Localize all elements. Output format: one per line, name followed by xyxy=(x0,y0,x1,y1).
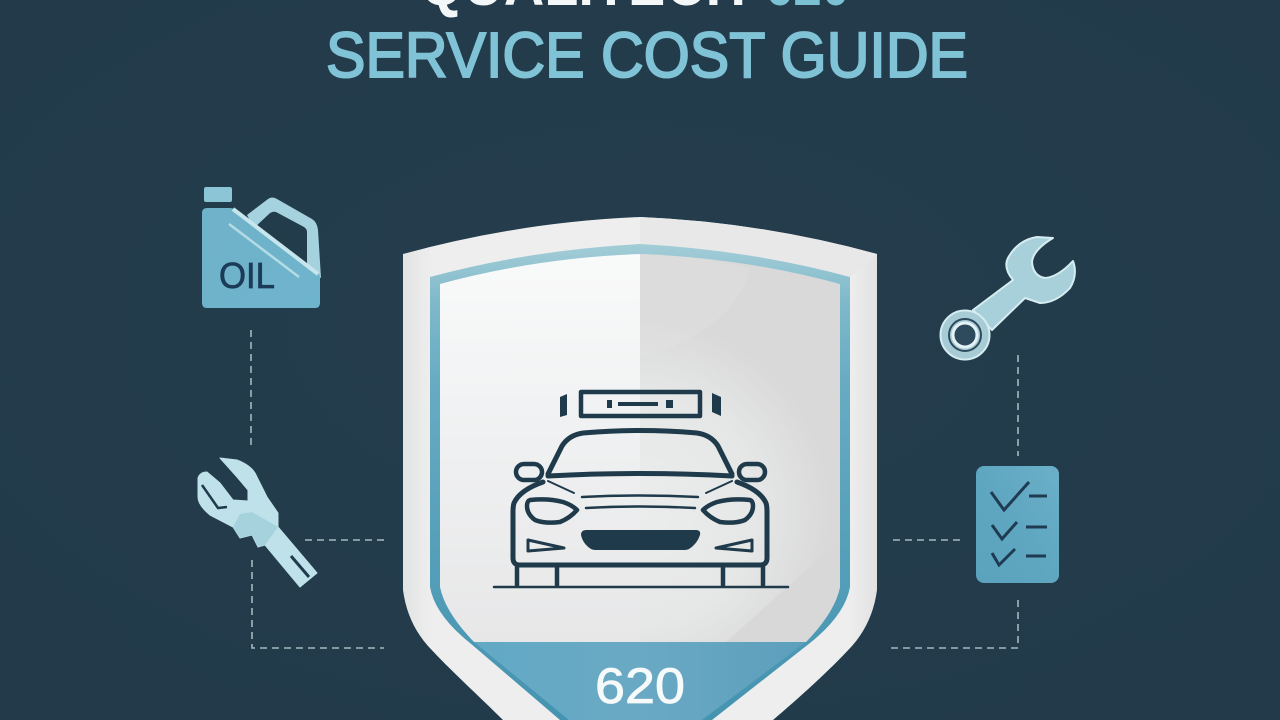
ground line xyxy=(494,586,788,588)
lift bar above car xyxy=(560,392,721,417)
headlights xyxy=(527,499,577,523)
car mirrors xyxy=(516,464,542,480)
shield blue border xyxy=(430,244,850,720)
icon: car front with lift bar xyxy=(494,392,788,587)
title line 2: SERVICE COST GUIDE xyxy=(326,19,968,91)
icon: oil canister: OIL xyxy=(219,255,275,296)
car windshield and hood line xyxy=(548,430,732,474)
hood lines xyxy=(582,496,698,508)
icon: checklist xyxy=(976,466,1059,583)
shield model band xyxy=(474,642,806,720)
car body xyxy=(513,482,767,565)
title xyxy=(326,0,968,91)
model number: 620 xyxy=(595,658,685,714)
shield badge xyxy=(403,217,877,720)
shield inner panel xyxy=(440,254,840,642)
icon: oil canister xyxy=(202,187,321,308)
dashed connector lines xyxy=(251,330,1018,648)
icon: spanner xyxy=(940,237,1075,360)
grille xyxy=(581,530,700,550)
icon: adjustable wrench xyxy=(198,458,317,587)
shield outer rim xyxy=(403,217,877,720)
bumper and wheels xyxy=(517,567,763,585)
fog lights xyxy=(528,540,752,551)
